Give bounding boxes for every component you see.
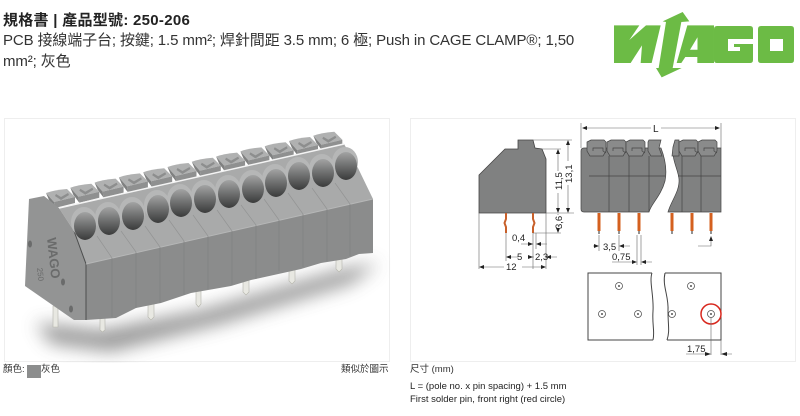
solder pattern: 1,75 [687, 344, 706, 355]
side view: 5 [517, 252, 522, 263]
side view: 2,3 [535, 252, 548, 263]
color swatch [27, 365, 41, 378]
side markings: WAGO [44, 237, 63, 279]
front view: 0,75 [612, 252, 630, 263]
description text: PCB 接線端子台; 按鍵; 1.5 mm²; 焊針間距 3.5 mm; 6 極; Push in CAGE CLAMP®; 1,50 [3, 32, 574, 49]
side markings [28, 237, 73, 312]
shadow [36, 263, 379, 351]
side markings: 250 [35, 267, 45, 282]
description text: mm²; 灰色 [3, 53, 70, 70]
notes [410, 381, 566, 404]
pins [53, 259, 342, 332]
front view: 3,5 [603, 242, 616, 253]
red circle [701, 304, 721, 324]
caption: dimensions: 尺寸 (mm) [410, 364, 454, 375]
panel: product photo [4, 118, 390, 362]
holes [74, 152, 357, 240]
body left face [25, 196, 86, 320]
notes: L = (pole no. x pin spacing) + 1.5 mm [410, 381, 566, 392]
side view: 3,6 [554, 216, 565, 229]
description text [3, 32, 574, 70]
caption: color [3, 364, 60, 378]
solder pattern [588, 273, 732, 356]
title: 規格書 | 產品型號: 250-206 [3, 12, 190, 29]
front view [581, 123, 721, 265]
side view: 11,5 [554, 172, 565, 190]
side view [479, 140, 575, 273]
side view: 0,4 [512, 233, 525, 244]
section lines [97, 183, 350, 317]
front view: L [653, 124, 659, 135]
logo: WAGO [614, 12, 794, 78]
hole collars [71, 147, 358, 237]
body front face [86, 199, 373, 320]
side view: 13,1 [564, 164, 575, 183]
caption: color: 灰色 [41, 364, 60, 375]
buttons [46, 132, 342, 208]
notes: First solder pin, front right (red circle) [410, 394, 565, 404]
body top face [59, 144, 373, 264]
side view: 12 [506, 262, 517, 273]
caption: color: 顏色: [3, 364, 25, 375]
connector photo illustration [25, 132, 380, 362]
panel: technical drawing [410, 118, 796, 362]
caption: similar to illustration: 類似於圖示 [341, 364, 389, 375]
dimension drawing [478, 123, 732, 356]
